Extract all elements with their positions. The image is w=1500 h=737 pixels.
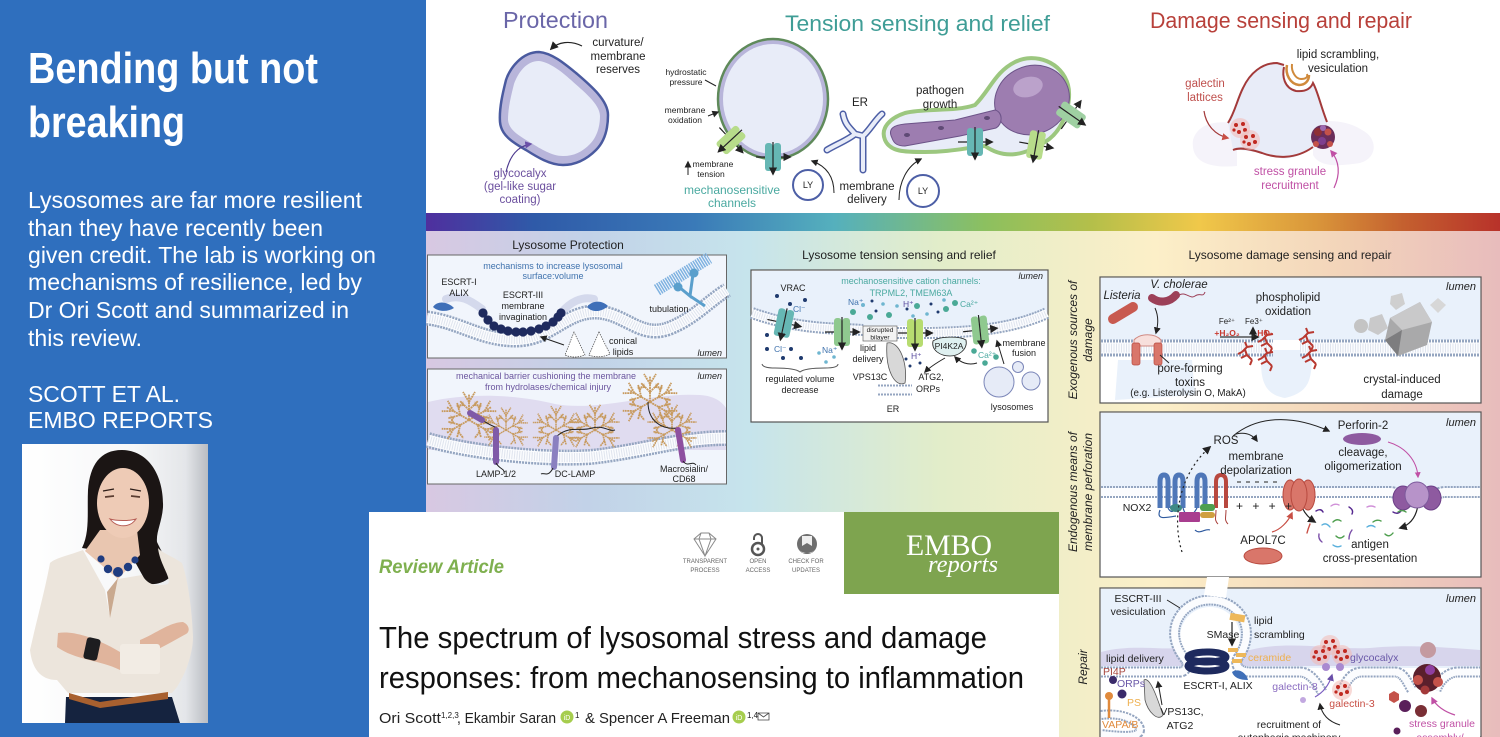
diagram: lysosome under membrane tension: oxidation <box>668 115 702 125</box>
text: authors: 1,4 <box>747 711 759 720</box>
panel: endogenous membrane perforation: antigen <box>1351 539 1389 551</box>
panel: tension sensing and relief detail: regulated volume <box>765 374 835 384</box>
panel: tension sensing and relief detail: ER <box>887 404 900 414</box>
text: authors: iD <box>564 715 570 722</box>
panel: repair mechanisms: SMase <box>1207 629 1239 641</box>
panel: lysosomal surface to volume mechanisms: ALIX <box>449 288 469 298</box>
panel: mechanical barrier glycocalyx: from hydrolases/chemical injury <box>485 382 612 392</box>
heading: Lysosome tension sensing and relief: Lysosome tension sensing and relief <box>802 248 996 262</box>
icon: LY lysosome circles: LY <box>803 180 813 190</box>
panel: repair mechanisms: scrambling <box>1254 629 1305 641</box>
text block: intro paragraph: Dr Ori Scott and summarized in <box>28 297 349 323</box>
text: authors: , Ekambir Saran <box>457 710 556 727</box>
text: authors <box>379 710 769 727</box>
diagram: ER tubule <box>827 97 882 170</box>
panel: repair mechanisms: VPS13C, <box>1160 706 1204 718</box>
panel: tension sensing and relief detail: ATG2, <box>918 372 944 382</box>
icon: check for updates: UPDATES <box>792 568 820 574</box>
icon: phospholipid oxidation <box>1220 328 1317 371</box>
panel: endogenous membrane perforation: APOL7C <box>1240 535 1286 547</box>
icon: transparent process diamond <box>683 533 727 574</box>
photo: portrait of Dr Ori Scott <box>22 444 208 723</box>
panel: lysosomal surface to volume mechanisms: ESCRT-I <box>441 277 477 287</box>
panel: lysosomal surface to volume mechanisms: tubulation <box>649 304 689 314</box>
icon: membrane potential signs <box>1236 482 1295 513</box>
icon: conical lipids <box>565 332 610 357</box>
panel: blue intro sidebar <box>0 0 426 737</box>
diagram: lysosome under membrane tension: membrane <box>665 105 706 115</box>
title: article title <box>379 620 1024 695</box>
callout: disrupted bilayer: bilayer <box>870 334 890 342</box>
icon: Perforin-2 pore <box>1393 482 1441 510</box>
panel: repair mechanisms: PI4P <box>1103 666 1126 678</box>
arrows and label: membrane delivery: membrane <box>840 181 894 193</box>
diagram: damaged lysosome and repair: galectin <box>1185 78 1225 90</box>
diagram: lysosome under membrane tension: pressure <box>669 77 703 87</box>
panel: tension sensing and relief detail: membrane <box>1002 338 1046 348</box>
text block: citation: SCOTT ET AL. <box>28 381 180 407</box>
text block: intro paragraph: this review. <box>28 325 142 351</box>
panel: tension sensing and relief detail: lumen <box>1018 271 1043 281</box>
diagram: damaged lysosome and repair: stress granule <box>1254 166 1326 178</box>
label: Exogenous sources of damage: Exogenous sources of <box>1066 279 1080 399</box>
diagram: damaged lysosome and repair: vesiculation <box>1308 63 1368 75</box>
icon: lysosome vesicles <box>984 362 1040 397</box>
heading: Bending but not breaking: breaking <box>28 98 185 147</box>
text block: intro paragraph <box>28 187 376 351</box>
panel: exogenous damage sources: HO· <box>1257 328 1273 338</box>
panel: pale gradient background <box>426 231 1500 737</box>
panel: lysosomal surface to volume mechanisms: conical <box>609 336 637 346</box>
panel: exogenous damage sources: V. cholerae <box>1150 279 1208 291</box>
panel: top overview white band <box>426 0 1500 213</box>
diagram: protected lysosome with glycocalyx: curvature/ <box>592 37 644 49</box>
diagram: pathogen growth in lysosome: pathogen <box>916 85 964 97</box>
panel: endogenous membrane perforation: Perforin-2 <box>1338 420 1388 432</box>
label: Exogenous sources of damage <box>1066 279 1095 399</box>
panel: tension sensing and relief detail <box>751 270 1048 422</box>
panel: mechanical barrier glycocalyx: CD68 <box>672 474 696 484</box>
icon: stress granule cluster <box>1389 642 1455 734</box>
icon: membrane potential signs: + + + + <box>1236 499 1295 513</box>
icon: glycan trees <box>438 374 700 453</box>
panel: mechanical barrier glycocalyx: DC-LAMP <box>555 469 595 479</box>
diagram: lysosome under membrane tension: hydrostatic <box>665 67 707 77</box>
panel: tension sensing and relief detail: delivery <box>852 354 884 364</box>
panel: exogenous damage sources <box>1100 277 1481 403</box>
text: authors: Ori Scott <box>379 710 442 727</box>
icon: open access: OPEN <box>749 559 767 565</box>
text: authors: 1,2,3 <box>441 711 459 720</box>
panel: exogenous damage sources: (e.g. Listerolysin O, MakA) <box>1130 388 1246 399</box>
panel: tension sensing and relief detail: mechanosensitive cation channels: <box>841 276 981 286</box>
title: article title: The spectrum of lysosomal stress and damage <box>379 620 987 655</box>
icon: NOX2 complex <box>1159 475 1228 532</box>
icon: Perforin-2 and APOL7C monomers <box>1244 433 1381 564</box>
icon: crystal <box>1354 293 1446 356</box>
panel: tension sensing and relief detail: ORPs <box>916 384 940 394</box>
panel: mechanical barrier glycocalyx: Macrosialin/ <box>660 464 709 474</box>
panel: exogenous damage sources: crystal-induced <box>1363 374 1441 386</box>
label: Repair: Repair <box>1076 648 1090 685</box>
text: authors: 1 <box>575 711 580 720</box>
panel: lysosomal surface to volume mechanisms: ESCRT-III <box>503 290 543 300</box>
panel: endogenous membrane perforation: oligomerization <box>1324 461 1402 473</box>
diagram: protected lysosome with glycocalyx: (gel-like sugar <box>484 181 556 193</box>
decorative tab: white connector between panels <box>1204 577 1229 598</box>
panel: tension sensing and relief detail: lipid <box>860 343 876 353</box>
text: authors: iD <box>736 715 742 722</box>
panel: repair mechanisms: vesiculation <box>1111 606 1166 618</box>
icon: tubulation motor on microtubule <box>657 258 709 306</box>
icon: membrane channels <box>764 305 999 350</box>
icon: open access <box>746 534 770 574</box>
panel: exogenous damage sources: pore-forming <box>1157 363 1223 375</box>
heading: Protection: Protection <box>503 7 608 33</box>
panel: exogenous damage sources: phospholipid <box>1256 292 1320 304</box>
panel: exogenous damage sources: +H₂O₂ <box>1214 328 1240 338</box>
heading: Tension sensing and relief: Tension sensing and relief <box>785 11 1051 36</box>
icon: LY lysosome circles: LY <box>918 186 928 196</box>
panel: lysosomal surface to volume mechanisms: invagination <box>499 312 547 322</box>
diagram: lysosome under membrane tension <box>665 39 828 210</box>
chart dots: ions: Ca²⁺ <box>960 299 978 309</box>
icon: ER membrane <box>878 384 912 396</box>
label: Endogenous means of membrane perforation: Endogenous means of <box>1066 430 1080 552</box>
diagram: protected lysosome with glycocalyx: glycocalyx <box>493 168 547 180</box>
icon: VPS13C bridge protein <box>887 343 906 384</box>
panel: journal article header <box>369 512 1059 737</box>
panel: repair mechanisms: stress granule <box>1409 718 1475 730</box>
arrows: tension panel flows <box>762 341 1004 372</box>
panel: repair mechanisms: ESCRT-I, ALIX <box>1183 680 1253 692</box>
panel: repair mechanisms: lipid <box>1254 615 1273 627</box>
panel: exogenous damage sources: damage <box>1381 389 1423 401</box>
icon: APOL7C pore <box>1283 479 1315 511</box>
panel: exogenous damage sources: Fe²⁺ <box>1219 317 1235 326</box>
chart dots: ions: Cl⁻ <box>774 344 787 354</box>
icon: Listeria and V. cholerae bacteria <box>1113 292 1205 319</box>
icon: galectin lattice <box>1300 635 1352 725</box>
chart dots: ions: H⁺ <box>903 299 914 309</box>
icon: check for updates <box>788 534 824 574</box>
diagram: damaged lysosome and repair <box>1185 49 1379 192</box>
panel: lysosomal surface to volume mechanisms: membrane <box>501 301 545 311</box>
panel: mechanical barrier glycocalyx: LAMP-1/2 <box>476 469 516 479</box>
panel: tension sensing and relief detail: TRPML2, TMEM63A <box>870 288 952 298</box>
panel: repair mechanisms: VAPA/B <box>1102 719 1138 731</box>
panel: mechanical barrier glycocalyx <box>428 369 726 484</box>
logo: EMBO reports: EMBO <box>906 529 992 562</box>
panel: endogenous membrane perforation: NOX2 <box>1123 502 1151 514</box>
logo: EMBO reports <box>844 512 1059 594</box>
panel: endogenous membrane perforation: cross-presentation <box>1323 553 1417 565</box>
diagram: protected lysosome with glycocalyx: reserves <box>596 64 640 76</box>
panel: exogenous damage sources: toxins <box>1175 377 1205 389</box>
label: Endogenous means of membrane perforation <box>1066 430 1095 552</box>
text block: citation <box>28 381 213 433</box>
diagram: pathogen growth in lysosome <box>884 53 1095 165</box>
panel: endogenous membrane perforation: lumen <box>1446 417 1476 429</box>
diagram: ER tubule: ER <box>852 97 868 109</box>
panel: lysosomal surface to volume mechanisms: lipids <box>613 347 634 357</box>
panel: repair mechanisms: glycocalyx <box>1350 652 1399 664</box>
panel: repair mechanisms: ceramide <box>1248 652 1291 664</box>
text: Review Article: Review Article <box>379 557 504 578</box>
diagram: protected lysosome with glycocalyx <box>484 37 645 206</box>
text block: intro paragraph: Lysosomes are far more resilient <box>28 187 363 213</box>
icon: transparent process diamond: TRANSPARENT <box>683 559 727 565</box>
icon: check for updates: CHECK FOR <box>788 559 824 565</box>
diagram: lysosome under membrane tension: membrane <box>693 159 734 169</box>
heading: Damage sensing and repair: Damage sensing and repair <box>1150 8 1412 33</box>
panel: mechanical barrier glycocalyx: mechanical barrier cushioning the membrane <box>456 371 636 381</box>
arrows: ROS production <box>1178 420 1418 552</box>
icon: open access: ACCESS <box>746 568 770 574</box>
panel: endogenous membrane perforation: depolarization <box>1220 465 1292 477</box>
panel: repair mechanisms: PS <box>1127 697 1141 709</box>
heading: Bending but not breaking <box>28 44 318 147</box>
diagram: lysosome under membrane tension: mechanosensitive <box>684 183 780 197</box>
diagram: lysosome under membrane tension: channels <box>708 196 756 210</box>
label: Endogenous means of membrane perforation: membrane perforation <box>1081 433 1095 551</box>
panel: tension sensing and relief detail: VRAC <box>780 283 806 293</box>
icon: LY lysosome circles <box>793 170 939 207</box>
icon: ESCRT coil and SMase <box>1167 600 1248 680</box>
panel: exogenous damage sources: lumen <box>1446 281 1476 293</box>
icon: PI4K2A enzyme: PI4K2A <box>935 341 964 351</box>
arrows and label: membrane delivery <box>812 159 921 206</box>
panel: repair mechanisms: ESCRT-III <box>1114 593 1162 605</box>
panel: tension sensing and relief detail: VPS13C <box>853 372 888 382</box>
text block: intro paragraph: than they have recently been <box>28 215 323 241</box>
panel: tension sensing and relief detail: fusion <box>1012 348 1036 358</box>
panel: repair mechanisms: lipid delivery <box>1106 653 1165 665</box>
panel: repair mechanisms: lumen <box>1446 593 1476 605</box>
icon: pore-forming toxin <box>1132 308 1169 365</box>
icon: ESCRT-I ALIX arcs <box>433 297 608 313</box>
panel: repair mechanisms <box>1100 588 1481 737</box>
panel: tension sensing and relief detail: lysosomes <box>991 402 1034 412</box>
panel: lysosomal surface to volume mechanisms: lumen <box>697 348 722 358</box>
heading: Bending but not breaking: Bending but not <box>28 44 318 93</box>
panel: repair mechanisms: galectin-3 <box>1329 698 1375 710</box>
panel: endogenous membrane perforation: cleavage, <box>1338 447 1388 459</box>
icon: ER with VPS13C and ORPs <box>1101 676 1163 736</box>
chart dots: ions: Na⁺ <box>822 345 837 355</box>
icon: PI4K2A enzyme <box>933 337 966 356</box>
panel: repair mechanisms: galectin-8 <box>1272 681 1318 693</box>
gradient bar: rainbow spectrum <box>426 213 1500 231</box>
panel: mechanical barrier glycocalyx: lumen <box>697 371 722 381</box>
chart dots: ions: Na⁺ <box>848 297 863 307</box>
diagram: damaged lysosome and repair: recruitment <box>1261 180 1320 192</box>
diagram: lysosome under membrane tension: tension <box>697 169 725 179</box>
chart dots: ions: Cl⁻ <box>793 304 806 314</box>
panel: exogenous damage sources: Listeria <box>1103 290 1141 302</box>
callout: disrupted bilayer <box>863 326 897 342</box>
icon: LAMP proteins <box>470 402 696 474</box>
chart dots: ions: Ca²⁺ <box>978 350 996 360</box>
diagram: protected lysosome with glycocalyx: coating) <box>500 194 541 206</box>
panel: exogenous damage sources: Fe3⁺ <box>1245 317 1263 326</box>
heading: Lysosome Protection: Lysosome Protection <box>512 238 624 252</box>
chart dots: ions <box>765 294 999 368</box>
diagram: protected lysosome with glycocalyx: membrane <box>591 51 645 63</box>
text block: intro paragraph: given credit. The lab is working on <box>28 242 376 268</box>
label: Exogenous sources of damage: damage <box>1081 318 1095 362</box>
panel: endogenous membrane perforation <box>1100 412 1481 577</box>
panel: lysosomal surface to volume mechanisms: surface:volume <box>522 271 584 281</box>
panel: repair mechanisms: ORPs <box>1117 678 1145 690</box>
arrows and label: membrane delivery: delivery <box>847 194 887 206</box>
panel: repair mechanisms: ATG2 <box>1167 720 1193 732</box>
callout: disrupted bilayer: disrupted <box>867 327 894 334</box>
text block: citation: EMBO REPORTS <box>28 407 213 433</box>
diagram: damaged lysosome and repair: lipid scrambling, <box>1297 49 1379 61</box>
panel: repair mechanisms: recruitment of <box>1257 719 1321 731</box>
panel: lysosomal surface to volume mechanisms <box>427 255 727 358</box>
panel: exogenous damage sources: oxidation <box>1265 306 1311 318</box>
chart dots: ions: H⁺ <box>911 351 922 361</box>
icon: transparent process diamond: PROCESS <box>690 568 720 574</box>
panel: endogenous membrane perforation: ROS <box>1214 435 1239 447</box>
icon: antigen fragments <box>1307 504 1406 547</box>
panel: endogenous membrane perforation: membrane <box>1229 451 1283 463</box>
panel: tension sensing and relief detail: decrease <box>781 385 819 395</box>
text: authors: & Spencer A Freeman <box>585 710 730 727</box>
diagram: pathogen growth in lysosome: growth <box>923 99 957 111</box>
logo: EMBO reports: reports <box>928 552 998 578</box>
diagram: damaged lysosome and repair: lattices <box>1187 92 1223 104</box>
text block: intro paragraph: mechanisms of resilience, led by <box>28 269 362 295</box>
heading: Lysosome damage sensing and repair: Lysosome damage sensing and repair <box>1188 248 1392 262</box>
panel: lysosomal surface to volume mechanisms: mechanisms to increase lysosomal <box>483 261 623 271</box>
icon: ESCRT-III bead chain <box>478 308 566 337</box>
title: article title: responses: from mechanosensing to inflammation <box>379 660 1024 695</box>
